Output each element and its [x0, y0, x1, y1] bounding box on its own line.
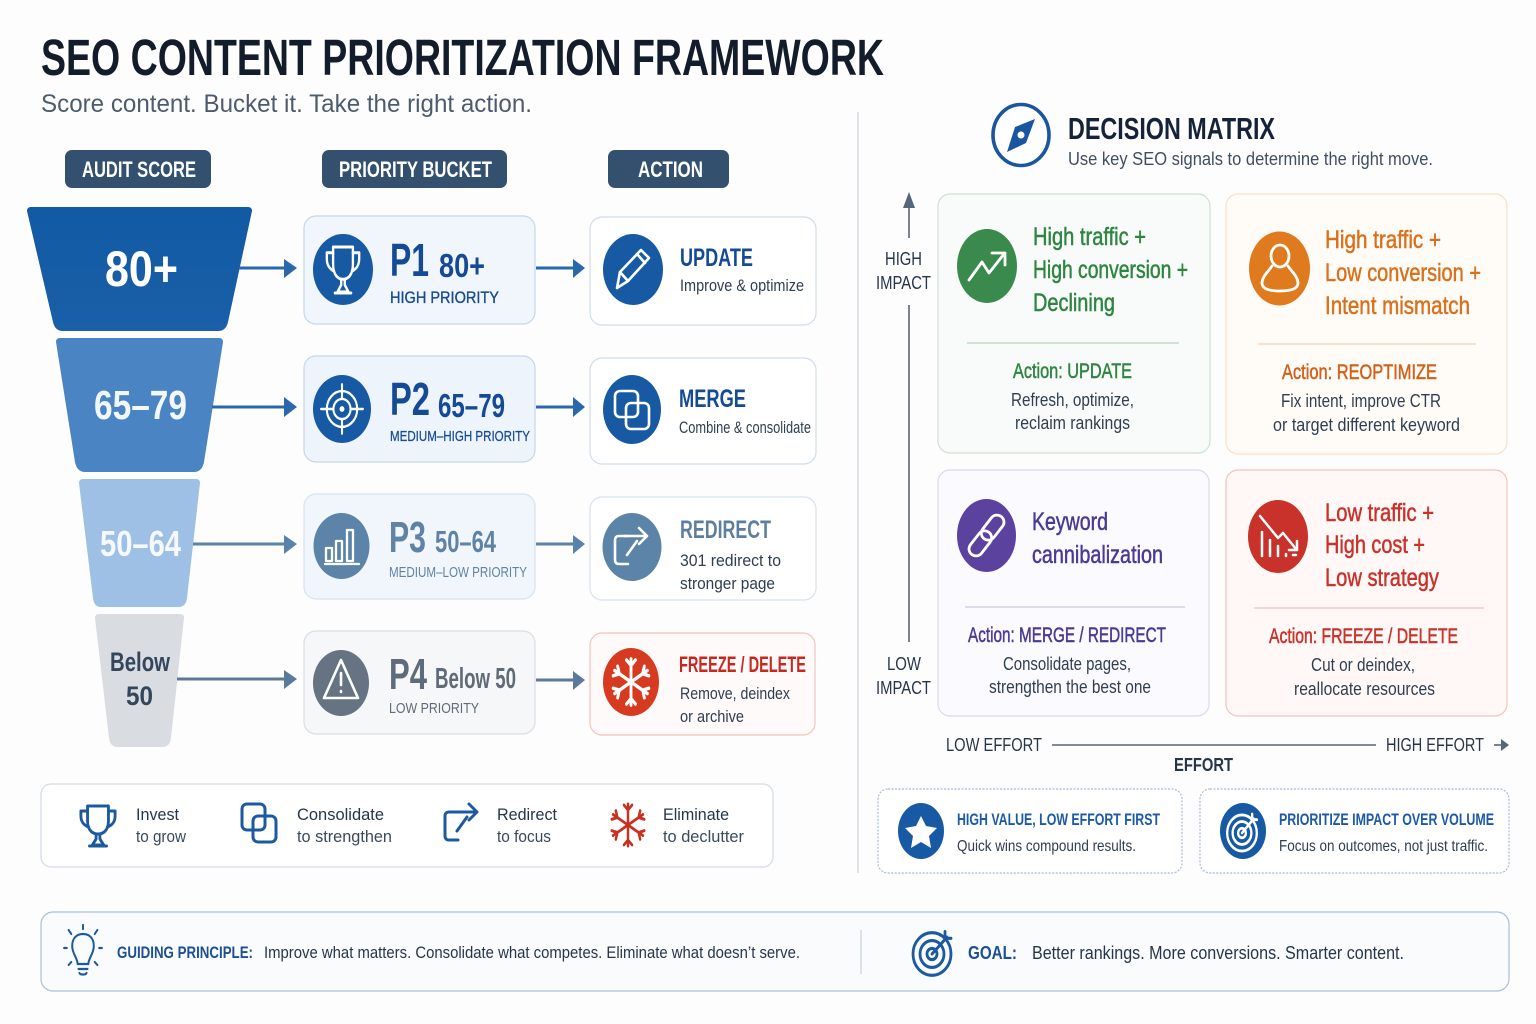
tip: high value low effort first [878, 789, 1182, 873]
panel: P4 bucket: Below 50 [435, 663, 516, 695]
column header: action: ACTION [638, 157, 703, 182]
panel: P1 bucket: 80+ [439, 247, 485, 284]
panel: high impact low effort (green): High conversion + [1033, 256, 1188, 284]
panel: low impact high effort (red): Low traffic + [1325, 499, 1434, 527]
panel: high impact high effort (orange) [1226, 194, 1507, 454]
panel: update action: Improve & optimize [680, 276, 804, 295]
panel: low impact high effort (red): Low strategy [1325, 564, 1439, 592]
column header: audit score: AUDIT SCORE [82, 157, 196, 182]
panel: P3 bucket: P3 [389, 513, 426, 562]
funnel tier: below 50: Below [110, 647, 171, 677]
legend: consolidate: Consolidate [297, 805, 384, 824]
icon: pencil [603, 234, 663, 305]
arrow: funnel to P1 [239, 259, 297, 278]
panel: P1 bucket [304, 216, 535, 324]
arrow: P1 to update [536, 259, 585, 278]
legend: consolidate [242, 804, 392, 846]
icon: star [898, 803, 944, 859]
vertical impact axis: IMPACT [876, 273, 931, 293]
column header: priority bucket: PRIORITY BUCKET [339, 157, 492, 182]
icon: rising trend [957, 229, 1017, 303]
panel: high impact low effort (green): Refresh, optimize, [1011, 390, 1134, 410]
legend panel [41, 784, 773, 867]
funnel tier: 80+ [27, 207, 252, 331]
icon: target [1220, 803, 1266, 859]
funnel tier: 65-79: 65–79 [94, 382, 187, 428]
subtitle: Score content. Bucket it. Take the right action. [41, 90, 532, 118]
panel: low impact low effort (purple): cannibalization [1032, 541, 1163, 569]
panel: P4 bucket: P4 [389, 650, 427, 699]
panel: redirect action: stronger page [680, 574, 775, 593]
vertical impact axis [876, 192, 931, 698]
goal text: GOAL: [968, 943, 1017, 963]
icon: crosshair [313, 375, 371, 443]
panel: freeze delete action: FREEZE / DELETE [679, 652, 806, 677]
panel: low impact low effort (purple): Action: MERGE / REDIRECT [968, 624, 1166, 647]
tip: prioritize impact over volume [1200, 789, 1509, 873]
heading: decision matrix: DECISION MATRIX [1068, 111, 1275, 146]
horizontal effort axis: EFFORT [1174, 755, 1233, 775]
icon: snowflake [603, 648, 659, 716]
icon: goal target [913, 932, 951, 975]
panel: low impact high effort (red): reallocate resources [1294, 679, 1435, 699]
legend: invest [81, 805, 187, 846]
legend: eliminate: to declutter [663, 827, 744, 846]
icon: person [1249, 232, 1310, 306]
guiding principle text: GUIDING PRINCIPLE: [117, 943, 253, 962]
panel: low impact high effort (red): Cut or deindex, [1311, 655, 1415, 675]
legend: eliminate: Eliminate [663, 805, 729, 824]
arrow: P4 to freeze [536, 671, 585, 690]
panel: P2 bucket: MEDIUM–HIGH PRIORITY [390, 428, 530, 445]
arrow: P2 to merge [536, 397, 585, 417]
arrow: funnel to P3 [193, 535, 297, 554]
panel: P2 bucket [304, 356, 535, 462]
icon: compass [993, 104, 1049, 166]
arrow: P3 to redirect [536, 535, 585, 554]
decision matrix subtitle: Use key SEO signals to determine the right move. [1068, 149, 1433, 169]
bottom banner [41, 912, 1509, 991]
tip: high value low effort first: HIGH VALUE, LOW EFFORT FIRST [957, 810, 1160, 829]
panel: low impact low effort (purple): strengthen the best one [989, 677, 1151, 697]
panel: low impact high effort (red): Action: FREEZE / DELETE [1269, 625, 1458, 648]
funnel tier: 50-64: 50–64 [100, 523, 181, 564]
goal text: Better rankings. More conversions. Smarter content. [1032, 943, 1404, 963]
panel: P1 bucket: P1 [390, 234, 429, 286]
panel: high impact high effort (orange): High traffic + [1325, 226, 1441, 254]
panel: freeze delete action: Remove, deindex [680, 684, 790, 703]
panel: high impact high effort (orange): or target different keyword [1273, 415, 1460, 435]
panel: redirect action: 301 redirect to [680, 551, 781, 570]
panel: low impact low effort (purple): Keyword [1032, 508, 1108, 536]
panel: high impact low effort (green) [938, 194, 1210, 453]
legend: redirect [445, 804, 557, 846]
funnel tier: 50-64 [79, 479, 200, 607]
legend: invest: Invest [136, 805, 179, 824]
tip: prioritize impact over volume: Focus on outcomes, not just traffic. [1279, 838, 1488, 855]
vertical impact axis: IMPACT [876, 678, 931, 698]
panel: P3 bucket: 50–64 [435, 524, 497, 559]
icon: redirect arrow [602, 513, 662, 581]
panel: high impact low effort (green): High traffic + [1033, 223, 1146, 251]
column header: audit score [65, 150, 211, 188]
panel: high impact high effort (orange): Low conversion + [1325, 259, 1481, 287]
funnel tier: below 50: 50 [126, 681, 153, 711]
panel: P2 bucket: P2 [390, 373, 430, 425]
title: SEO CONTENT PRIORITIZATION FRAMEWORK [41, 29, 884, 86]
panel: P3 bucket [304, 494, 535, 599]
arrow: funnel to P4 [177, 670, 297, 689]
icon: overlapping squares [603, 375, 661, 444]
panel: freeze delete action: or archive [680, 707, 744, 726]
legend: consolidate: to strengthen [297, 827, 392, 846]
vertical impact axis: HIGH [885, 249, 922, 269]
panel: P4 bucket: LOW PRIORITY [389, 700, 479, 717]
panel: high impact high effort (orange): Action: REOPTIMIZE [1282, 361, 1437, 384]
panel: high impact low effort (green): reclaim rankings [1015, 413, 1130, 433]
icon: declining chart [1248, 500, 1308, 573]
icon: bar chart [314, 513, 370, 579]
arrow: funnel to P2 [212, 397, 297, 417]
panel: high impact low effort (green): Declining [1033, 289, 1115, 317]
vertical impact axis: LOW [887, 654, 921, 674]
horizontal effort axis: LOW EFFORT [946, 735, 1042, 755]
panel: P1 bucket: HIGH PRIORITY [390, 288, 499, 307]
funnel tier: below 50 [95, 614, 184, 747]
panel: P4 bucket [304, 631, 535, 734]
panel: freeze delete action [590, 633, 815, 735]
panel: redirect action [590, 497, 816, 600]
legend: invest: to grow [136, 827, 187, 846]
panel: merge action: Combine & consolidate [679, 418, 811, 437]
panel: high impact high effort (orange): Fix intent, improve CTR [1281, 391, 1441, 411]
icon: light bulb [64, 925, 102, 974]
column header: priority bucket [322, 150, 507, 188]
panel: update action [590, 217, 816, 325]
panel: low impact low effort (purple): Consolidate pages, [1003, 654, 1131, 674]
panel: redirect action: REDIRECT [680, 516, 771, 544]
icon: trophy [313, 234, 373, 305]
funnel tier: 65-79 [56, 338, 223, 472]
panel: merge action [590, 358, 816, 464]
panel: low impact low effort (purple) [938, 470, 1209, 716]
legend: redirect: Redirect [497, 805, 557, 824]
panel: high impact low effort (green): Action: UPDATE [1013, 360, 1132, 383]
legend: redirect: to focus [497, 827, 551, 846]
tip: high value low effort first: Quick wins compound results. [957, 838, 1136, 855]
column header: action [608, 150, 729, 188]
panel: merge action: MERGE [679, 385, 746, 413]
legend: eliminate [611, 804, 744, 846]
horizontal effort axis: HIGH EFFORT [1386, 735, 1484, 755]
panel: P2 bucket: 65–79 [438, 387, 505, 424]
panel: update action: UPDATE [680, 244, 753, 272]
funnel tier: 80+: 80+ [105, 241, 178, 297]
panel: low impact high effort (red) [1226, 470, 1507, 716]
panel: P3 bucket: MEDIUM–LOW PRIORITY [389, 564, 527, 581]
icon: chain link [957, 499, 1016, 572]
guiding principle text: Improve what matters. Consolidate what competes. Eliminate what doesn’t serve. [264, 943, 800, 962]
panel: high impact high effort (orange): Intent mismatch [1325, 292, 1470, 320]
panel: low impact high effort (red): High cost + [1325, 531, 1425, 559]
icon: warning triangle [313, 650, 369, 716]
horizontal effort axis [946, 735, 1509, 775]
